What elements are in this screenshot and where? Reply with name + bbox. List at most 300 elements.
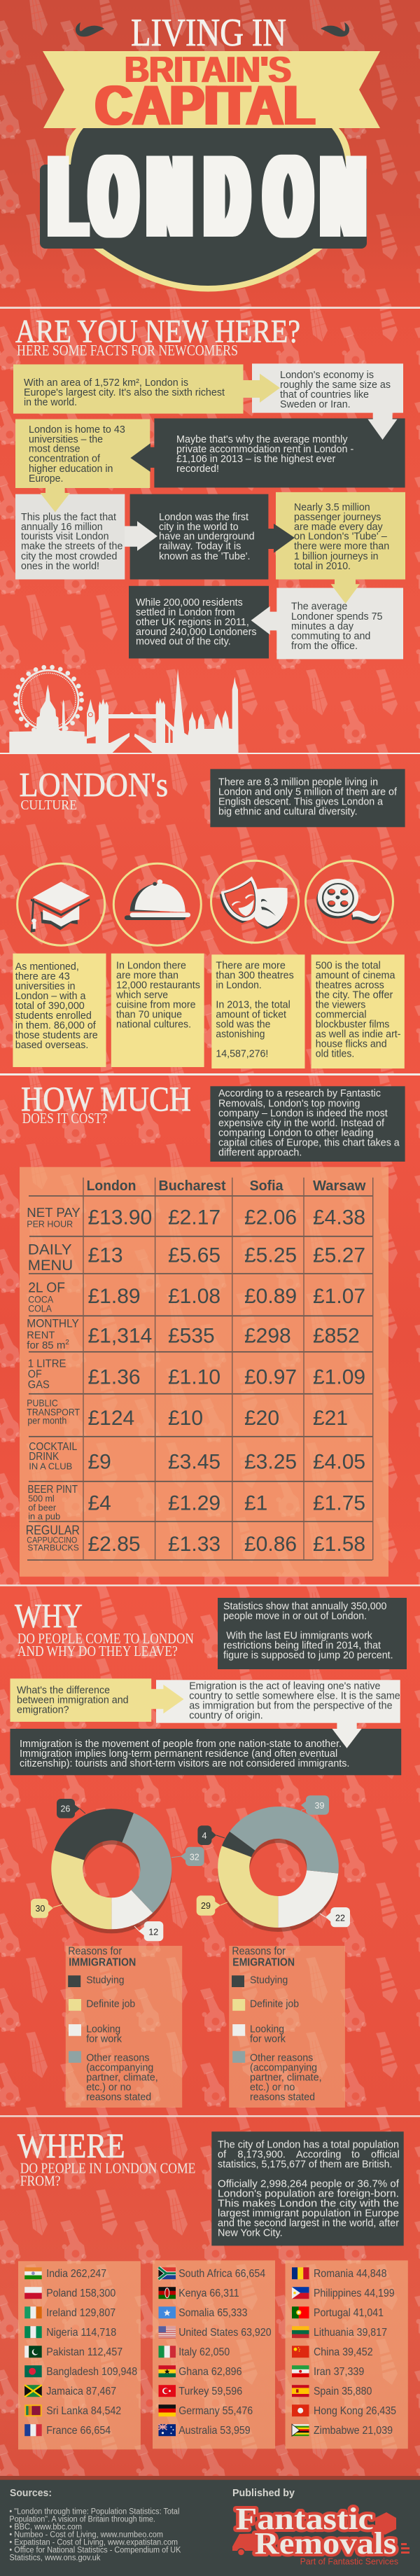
country panel 2: United States 63,920: [178, 2327, 272, 2339]
heading: HOW MUCH: [21, 1079, 191, 1118]
label 32: [172, 1847, 204, 1866]
table header: Warsaw: [313, 1178, 366, 1194]
row: beer: BEER PINT: [27, 1484, 78, 1496]
flag: bangladesh: [24, 2365, 42, 2377]
culture card: cinemas: old titles.: [316, 1048, 354, 1059]
row: daily menu: [28, 1242, 365, 1274]
label 4: 4: [202, 1831, 207, 1841]
fact: tourists: annually 16 million: [21, 522, 103, 533]
row: public transport: £20: [244, 1407, 279, 1430]
row: net pay: £2.06: [244, 1206, 297, 1229]
icon: cloche: [125, 879, 190, 920]
row: beer: in a pub: [28, 1511, 60, 1522]
row: cocktail: IN A CLUB: [29, 1461, 72, 1471]
country panel 1: Nigeria 114,718: [46, 2327, 116, 2339]
skyline of london: [9, 667, 239, 753]
row: net pay: £2.17: [168, 1206, 220, 1229]
immigration box: [10, 1729, 401, 1775]
fact: area: Europe's largest city. It's also the sixth richest: [24, 387, 225, 398]
fact: passengers: total in 2010.: [294, 561, 351, 572]
row: net pay: PER HOUR: [27, 1218, 73, 1229]
flag: philippines: [292, 2287, 309, 2299]
row: beer: [27, 1484, 365, 1522]
intro box: Statistics show that annually 350,000: [223, 1601, 386, 1612]
country panel 1: Bangladesh 109,948: [46, 2366, 137, 2378]
legend: emigration: Definite job: [250, 1998, 299, 2010]
fact: universities: universities – the: [29, 434, 103, 445]
subheading: DO PEOPLE IN LONDON COME: [20, 2159, 195, 2176]
immigration box: Immigration implies long-term permanent residence (and often eventual: [20, 1748, 337, 1760]
label 22: [320, 1907, 350, 1927]
country panel 1: Pakistan 112,457: [46, 2346, 122, 2358]
legend: emigration: (accompanying: [250, 2062, 317, 2074]
label 26: 26: [60, 1804, 70, 1813]
row: beer: 500 ml: [28, 1493, 55, 1503]
row: cocktail: [29, 1441, 365, 1473]
fact: economy: roughly the same size as: [280, 380, 391, 391]
fact: passengers: on London's 'Tube' –: [294, 531, 388, 543]
legend: immigration: (accompanying: [86, 2062, 153, 2074]
fact: area: [13, 364, 244, 414]
culture card: restaurants: In London there: [116, 960, 186, 971]
sources: • BBC, www.bbc.com: [9, 2523, 82, 2532]
row: gas: 1 LITRE: [28, 1358, 66, 1370]
legend: immigration: Reasons for: [68, 1946, 122, 1958]
row: public transport: £21: [313, 1407, 348, 1430]
sources: Population". A vision of Britain through time.: [9, 2516, 155, 2524]
population box: This makes London the city with the: [218, 2198, 399, 2209]
population box: London's population are foreign-born.: [218, 2188, 399, 2199]
intro box: expensive city in the world. Instead of: [218, 1118, 385, 1129]
fact: economy: that of countries like: [280, 389, 369, 401]
country panel 3: Lithuania 39,817: [314, 2327, 387, 2339]
row: gas: [28, 1358, 365, 1391]
label 30: [31, 1899, 62, 1918]
immigration box: citizenship): tourists and short-term visitors are not considered immigrants.: [20, 1758, 349, 1769]
intro box: company – London is indeed the most: [218, 1108, 388, 1119]
legend: emigration: Reasons for: [232, 1946, 286, 1958]
fact: passengers: are made every day: [294, 522, 383, 533]
culture card: restaurants: 12,000 restaurants: [116, 980, 200, 991]
culture card: universities: London – with a: [15, 991, 86, 1002]
sources: • Office for National Statistics - Compendium of UK: [9, 2547, 181, 2555]
label 39: [300, 1795, 329, 1818]
country panel 3: Hong Kong 26,435: [314, 2405, 396, 2417]
row: daily menu: MENU: [28, 1258, 73, 1274]
country panel 2: [153, 2260, 275, 2449]
arrow: [331, 579, 360, 604]
icon: box: [375, 2512, 396, 2535]
cost table: [20, 1167, 388, 1577]
flag: kenya: [158, 2287, 176, 2299]
fact: residents: around 240,000 Londoners: [136, 627, 257, 638]
row: monthly rent: [27, 1317, 360, 1351]
table header: Bucharest: [158, 1178, 226, 1194]
fact: economy: [252, 363, 403, 413]
row: cappuccino: REGULAR: [26, 1524, 80, 1538]
row: public transport: per month: [27, 1414, 66, 1426]
heading: WHY: [15, 1596, 83, 1635]
row: daily menu: DAILY: [28, 1242, 72, 1258]
table header: [87, 1178, 366, 1194]
intro box: figure is supposed to jump 20 percent.: [223, 1650, 393, 1661]
fact: rent: [154, 419, 405, 487]
fact: commuting: [276, 588, 403, 659]
row: monthly rent: MONTHLY: [27, 1317, 79, 1330]
legend: immigration: Studying: [86, 1975, 125, 1986]
culture card: cinemas: amount of cinema: [316, 970, 396, 981]
flag: united states: [158, 2326, 176, 2338]
intro box: big ethnic and cultural diversity.: [218, 806, 358, 817]
fact: rent: private accommodation rent in London -: [176, 444, 354, 455]
population box: largest immigrant population in Europe: [218, 2208, 399, 2219]
intro box: English descent. This gives London a: [218, 796, 384, 807]
legend: immigration: Other reasons: [86, 2052, 150, 2064]
row: cocktail: £3.45: [168, 1450, 220, 1473]
flag: ireland: [24, 2306, 42, 2318]
culture card: universities: total of 390,000: [15, 1001, 85, 1012]
flag: poland: [24, 2287, 42, 2299]
logo: fantastic removals: [232, 2502, 410, 2567]
subheading: HERE SOME FACTS FOR NEWCOMERS: [17, 342, 238, 358]
intro box: people move in or out of London.: [223, 1610, 367, 1622]
logo: fantastic removals: Fantastic: [236, 2502, 374, 2536]
legend: immigration: etc.) or no: [86, 2082, 132, 2094]
icon: theatre masks: [220, 877, 288, 929]
country panel 1: Sri Lanka 84,542: [46, 2405, 121, 2417]
row: coca cola: £0.89: [244, 1285, 297, 1308]
icon: film reel: [316, 879, 382, 924]
row: beer: £1.29: [168, 1492, 220, 1515]
flag: india: [24, 2267, 42, 2279]
culture card: universities: in them. 86,000 of: [15, 1020, 97, 1031]
logo: fantastic removals: Removals: [255, 2526, 396, 2561]
arrow: [268, 524, 295, 553]
fact: residents: settled in London from: [136, 607, 235, 618]
country panel 1: France 66,654: [46, 2425, 111, 2437]
population box: to: [351, 2150, 360, 2161]
title: living in: LIVING IN: [131, 11, 286, 55]
flag: zimbabwe: [292, 2424, 309, 2436]
row: cocktail: £4.05: [313, 1450, 365, 1473]
legend: immigration: Definite job: [86, 1998, 135, 2010]
fact: universities: [15, 419, 150, 488]
row: gas: £1.10: [168, 1366, 220, 1389]
country panel 1: Poland 158,300: [46, 2288, 115, 2299]
row: gas: £0.97: [244, 1366, 297, 1389]
label 12: [134, 1921, 163, 1941]
flag: china: [292, 2346, 309, 2358]
sources: [9, 2487, 181, 2563]
logo: fantastic removals: Part of Fantastic Services: [300, 2556, 398, 2567]
title: capital: CAPITAL: [95, 74, 315, 137]
row: coca cola: £1.89: [88, 1285, 141, 1308]
donut chart: immigration: [31, 1799, 204, 1941]
row: cocktail: COCKTAIL: [29, 1441, 77, 1453]
row: public transport: £10: [168, 1407, 203, 1430]
immigration box: Immigration is the movement of people from one nation-state to another.: [20, 1739, 342, 1750]
donut chart: emigration: [197, 1795, 350, 1928]
label 32: 32: [190, 1853, 200, 1863]
intro box: [210, 769, 405, 827]
label 26: [57, 1799, 85, 1818]
fact: tourists: city the most crowded: [21, 551, 117, 562]
fact: universities: most dense: [29, 444, 80, 455]
intro box: comparing London to other leading: [218, 1127, 374, 1139]
emigration box: Emigration is the act of leaving one's native: [189, 1680, 380, 1692]
footer: [0, 2476, 420, 2576]
label 12: 12: [148, 1927, 158, 1937]
population box: New York City.: [218, 2227, 283, 2239]
emigration box: country to settle somewhere else. It is the same: [189, 1690, 400, 1701]
fact: residents: [129, 586, 269, 658]
country panel 3: Iran 37,339: [314, 2366, 364, 2378]
fact: passengers: [276, 492, 405, 580]
country panel 3: Romania 44,848: [314, 2268, 387, 2280]
row: monthly rent: RENT: [27, 1330, 55, 1342]
fact: passengers: there were more than: [294, 541, 389, 552]
fact: tube: [130, 494, 268, 580]
legend: immigration: reasons stated: [86, 2091, 151, 2103]
country panel 3: China 39,452: [314, 2346, 373, 2358]
row: cappuccino: £1.33: [168, 1533, 220, 1556]
fact: tube: known as the 'Tube'.: [159, 551, 251, 562]
row: monthly rent: £1,314: [88, 1324, 152, 1347]
intro box: capital cities of Europe, this chart takes a: [218, 1137, 400, 1148]
culture card: cinemas: commercial: [316, 1009, 367, 1020]
emigration box: [156, 1680, 400, 1723]
fact: universities: concentration of: [29, 454, 101, 465]
fact: tube: have an underground: [159, 531, 255, 543]
culture card: cinemas: theatres across: [316, 980, 384, 991]
title: britain's: BRITAIN'S: [125, 50, 291, 90]
title block: [40, 11, 380, 291]
fact: passengers: passenger journeys: [294, 512, 381, 523]
fact: tube: London was the first: [159, 512, 248, 523]
culture card: cinemas: blockbuster films: [316, 1019, 389, 1030]
row: cocktail: £9: [88, 1450, 111, 1473]
culture card: theatres: astonishing: [216, 1029, 265, 1040]
section: are you new here: [13, 314, 405, 659]
culture card: cinemas: the city. The offer: [316, 989, 393, 1001]
row: gas: £1.36: [88, 1366, 141, 1389]
culture card: universities: [13, 954, 106, 1067]
row: cappuccino: £0.86: [244, 1533, 297, 1556]
subheading: DOES IT COST?: [22, 1110, 107, 1127]
flag: nigeria: [24, 2326, 42, 2338]
culture card: cinemas: [312, 954, 405, 1068]
row: coca cola: [28, 1281, 365, 1314]
country panel 3: Portugal 41,041: [314, 2307, 384, 2319]
row: monthly rent: £852: [313, 1324, 360, 1347]
culture card: theatres: than 300 theatres: [216, 970, 294, 981]
intro box: With the last EU immigrants work: [226, 1630, 373, 1641]
intro box: [218, 1598, 407, 1669]
population box: 8,173,900.: [237, 2150, 286, 2161]
country panel 3: Philippines 44,199: [314, 2288, 395, 2299]
culture card: theatres: There are more: [216, 960, 286, 971]
legend: emigration: Studying: [250, 1975, 288, 1986]
row: beer: £4: [88, 1492, 111, 1515]
fact: area: in the world.: [24, 397, 77, 408]
emigration box: country of origin.: [189, 1710, 263, 1721]
flag: spain: [292, 2385, 309, 2397]
row: public transport: £124: [88, 1407, 134, 1430]
country panel 1: [18, 2261, 141, 2449]
fact: tourists: make the streets of the: [21, 541, 122, 552]
question box: What's the difference: [17, 1685, 110, 1696]
row: beer: £1.75: [313, 1492, 365, 1515]
moustache right: [321, 22, 349, 36]
row: coca cola: £1.08: [168, 1285, 220, 1308]
row: net pay: NET PAY: [27, 1206, 80, 1220]
legend: emigration: partner, climate,: [250, 2072, 322, 2084]
legend: immigration: IMMIGRATION: [69, 1956, 136, 1968]
legend: emigration: etc.) or no: [250, 2082, 295, 2094]
row: monthly rent: for 85 m: [27, 1339, 65, 1351]
flag: somalia: [158, 2306, 176, 2318]
intro box: restrictions being lifted in 2014, that: [223, 1640, 381, 1651]
culture card: cinemas: 500 is the total: [316, 960, 381, 971]
fact: residents: moved out of the city.: [136, 636, 231, 648]
fact: residents: other UK regions in 2011,: [136, 617, 249, 628]
culture card: cinemas: as well as indie art-: [316, 1029, 401, 1040]
fact: rent: £1,106 in 2013 – is the highest ever: [176, 454, 335, 465]
legend: emigration: reasons stated: [250, 2091, 315, 2103]
culture card: theatres: in London.: [216, 980, 262, 991]
country panel 1: India 262,247: [46, 2268, 106, 2280]
row: daily menu: £5.65: [168, 1244, 220, 1267]
arrow: [243, 374, 280, 403]
fact: commuting: from the office.: [291, 641, 358, 652]
fact: commuting: commuting to and: [291, 631, 370, 642]
culture card: universities: there are 43: [15, 971, 70, 982]
row: coca cola: 2L OF: [28, 1281, 65, 1296]
population box: official: [371, 2150, 400, 2161]
flag: italy: [158, 2346, 176, 2358]
sources: Sources:: [10, 2487, 52, 2499]
row: beer: £1: [244, 1492, 267, 1515]
culture card: universities: As mentioned,: [15, 961, 79, 973]
fact: tourists: This plus the fact that: [21, 512, 116, 523]
fact: tourists: tourists visit London: [21, 531, 109, 543]
fact: tube: city in the world to: [159, 522, 239, 533]
culture card: theatres: amount of ticket: [216, 1009, 286, 1020]
question box: emigration?: [17, 1704, 69, 1715]
flag: jamaica: [24, 2385, 42, 2397]
fact: commuting: Londoner spends 75: [291, 611, 382, 622]
arrow: [332, 1722, 362, 1748]
fact: residents: While 200,000 residents: [136, 597, 243, 608]
flag: pakistan: [24, 2346, 42, 2358]
fact: economy: London's economy is: [280, 370, 374, 381]
row: public transport: [27, 1397, 348, 1430]
legend: emigration: Other reasons: [250, 2052, 313, 2064]
row: daily menu: £5.27: [313, 1244, 365, 1267]
flag: ghana: [158, 2365, 176, 2377]
legend: emigration: Looking: [250, 2024, 284, 2035]
culture card: universities: universities in: [15, 981, 75, 992]
label 4: [197, 1825, 225, 1845]
row: cocktail: £3.25: [244, 1450, 297, 1473]
country panel 2: South Africa 66,654: [178, 2268, 265, 2280]
flag: lithuania: [292, 2326, 309, 2338]
london eye: [15, 667, 82, 733]
intro box: Removals, London's top moving: [218, 1098, 360, 1109]
flag: portugal: [292, 2306, 309, 2318]
culture card: restaurants: than 70 unique: [116, 1009, 182, 1020]
row: cappuccino: CAPPUCCINO: [27, 1535, 77, 1545]
fact: commuting: minutes a day: [291, 621, 354, 632]
population box: and the second largest in the world, after: [218, 2218, 399, 2229]
culture card: restaurants: national cultures.: [116, 1019, 191, 1030]
sources: • Numbeo - Cost of Living, www.numbeo.com: [9, 2531, 163, 2540]
emigration box: as immigration but from the perspective of the: [189, 1700, 393, 1711]
country panel 3: Spain 35,880: [314, 2386, 372, 2397]
fact: commuting: The average: [291, 601, 347, 613]
arrow: [368, 412, 398, 440]
arrow: [130, 443, 155, 472]
culture card: restaurants: which serve: [115, 989, 168, 1001]
country panel 1: Jamaica 87,467: [46, 2386, 116, 2397]
sources: • Expatistan - Cost of Living, www.expatistan.com: [9, 2539, 178, 2547]
heading: WHERE: [18, 2126, 125, 2165]
row: monthly rent: 2: [65, 1339, 69, 1346]
fact: universities: Europe.: [29, 473, 63, 485]
label 29: [197, 1895, 227, 1916]
population box: statistics, 5,175,677 of them are British.: [218, 2159, 392, 2170]
label 22: 22: [335, 1913, 345, 1923]
row: net pay: [27, 1206, 365, 1229]
legend: immigration: partner, climate,: [86, 2072, 158, 2084]
legend: immigration: Looking: [86, 2024, 120, 2035]
legend: emigration: for work: [250, 2033, 286, 2045]
culture card: universities: based overseas.: [15, 1040, 88, 1051]
fact: tube: railway. Today it is: [159, 541, 241, 552]
row: gas: £1.09: [313, 1366, 365, 1389]
fact: tourists: ones in the world!: [21, 561, 99, 572]
country panel 2: Somalia 65,333: [178, 2307, 248, 2319]
fact: economy: Sweden or Iran.: [280, 399, 351, 410]
badge circle: [40, 128, 367, 291]
population box: of: [218, 2150, 227, 2161]
row: public transport: PUBLIC: [27, 1397, 58, 1408]
intro box: different approach.: [218, 1147, 302, 1158]
row: cappuccino: £2.85: [88, 1533, 141, 1556]
question box: [10, 1678, 151, 1722]
culture card: restaurants: cuisine from more: [116, 999, 196, 1010]
country panel 2: Kenya 66,311: [178, 2288, 239, 2299]
flag: iran: [292, 2365, 309, 2377]
subheading: AND WHY DO THEY LEAVE?: [18, 1643, 178, 1659]
flag: south africa: [158, 2267, 176, 2279]
legend: immigration: [66, 1946, 182, 2108]
culture card: cinemas: house flicks and: [316, 1038, 387, 1050]
arrow: [40, 487, 70, 512]
section: london's culture: [13, 765, 405, 1068]
fact: tourists: [15, 494, 125, 580]
section: how much: [20, 1079, 405, 1577]
country panel 2: Italy 62,050: [178, 2346, 230, 2358]
heading: ARE YOU NEW HERE?: [15, 314, 300, 350]
country panel 2: Germany 55,476: [178, 2405, 253, 2417]
intro box: [210, 1086, 405, 1162]
country panel 2: Ghana 62,896: [178, 2366, 242, 2378]
flag: hong kong: [292, 2404, 309, 2416]
icon: van: [232, 2533, 260, 2556]
culture card: restaurants: are more than: [116, 970, 178, 981]
population box: The city of London has a total population: [218, 2140, 399, 2151]
